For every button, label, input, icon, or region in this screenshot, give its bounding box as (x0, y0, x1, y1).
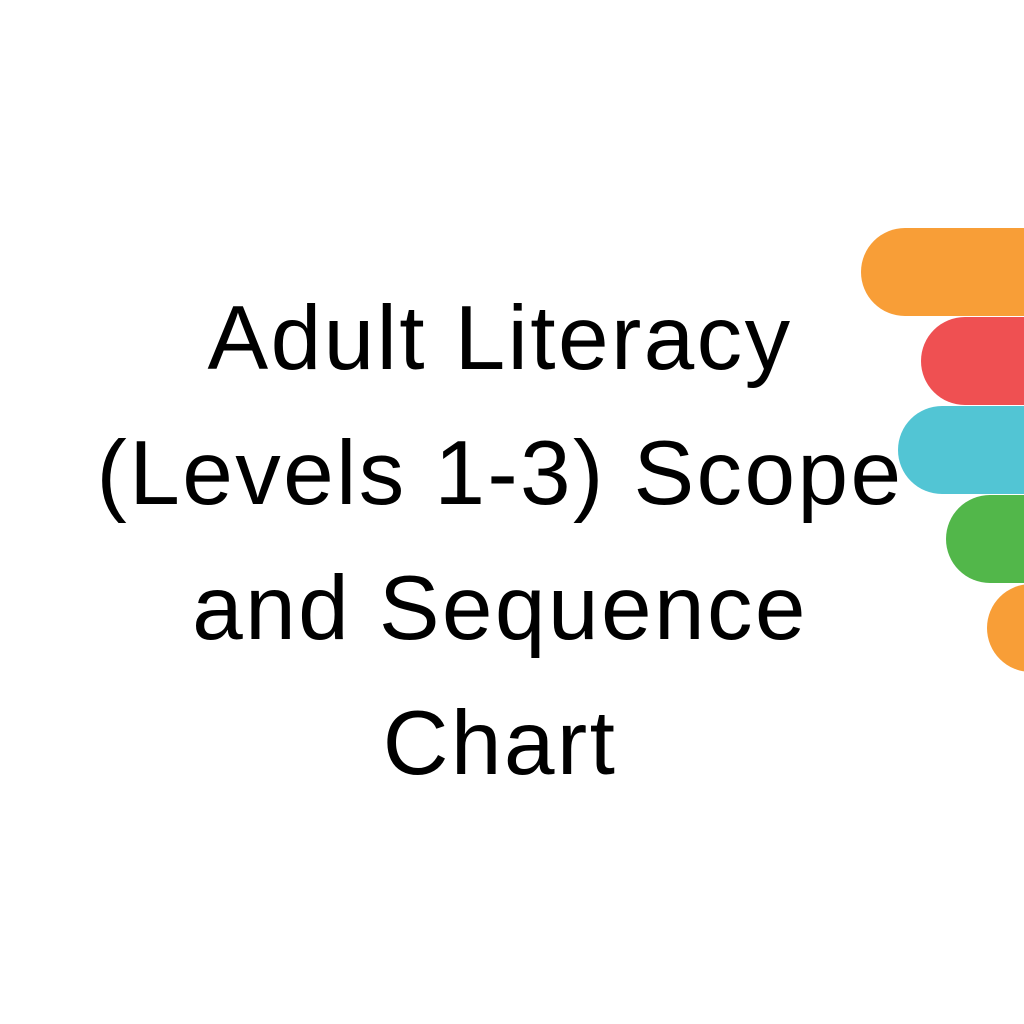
title (96, 288, 903, 794)
title: and Sequence (192, 558, 808, 659)
bar: cyan (898, 406, 1024, 494)
decorative bars group (861, 228, 1024, 672)
bar: orange top (861, 228, 1024, 316)
title: Chart (383, 693, 617, 794)
title: (Levels 1-3) Scope (96, 423, 903, 524)
bar: red (921, 317, 1024, 405)
title: Adult Literacy (208, 288, 792, 389)
bar: green (946, 495, 1024, 583)
bar: orange bottom (987, 584, 1024, 672)
